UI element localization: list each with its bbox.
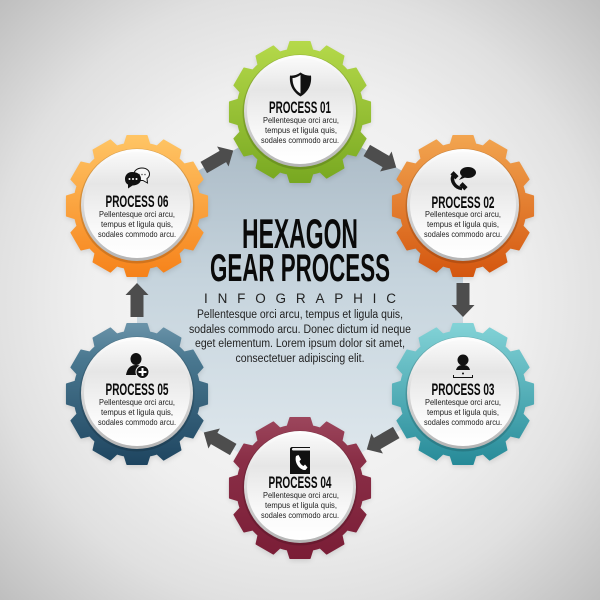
central hexagon panel (137, 112, 463, 488)
description: Pellentesque orci arcu, (263, 115, 339, 125)
description: tempus et ligula quis, (101, 219, 173, 229)
icon: person at laptop (453, 354, 473, 378)
arrow: 05 to 06 (126, 283, 148, 317)
arrow: 06 to 01 (198, 141, 239, 177)
icon: chat bubbles (125, 168, 150, 188)
description: sodales commodo arcu. (98, 229, 176, 239)
description: sodales commodo arcu. (98, 417, 176, 427)
title (210, 210, 390, 290)
label: PROCESS 03 (432, 381, 494, 399)
description: sodales commodo arcu. (261, 510, 339, 520)
arrow: 03 to 04 (361, 423, 402, 459)
description: tempus et ligula quis, (265, 125, 337, 135)
label: PROCESS 02 (432, 194, 494, 212)
description: Pellentesque orci arcu, (99, 209, 175, 219)
label: PROCESS 04 (268, 474, 332, 492)
label: PROCESS 06 (106, 193, 168, 211)
title: HEXAGON (242, 210, 358, 257)
gear: process 01 (230, 42, 370, 184)
description (261, 490, 339, 520)
description (424, 209, 502, 239)
subtitle: INFOGRAPHIC (204, 291, 396, 306)
description: tempus et ligula quis, (101, 407, 173, 417)
description: tempus et ligula quis, (265, 500, 337, 510)
description text: consectetuer adipiscing elit. (236, 353, 364, 365)
gear: process 06 (67, 136, 207, 278)
description text: sodales commodo arcu. Donec dictum id neque (189, 324, 411, 336)
label: PROCESS 05 (106, 381, 168, 399)
description: Pellentesque orci arcu, (425, 397, 501, 407)
description: Pellentesque orci arcu, (99, 397, 175, 407)
description (424, 397, 502, 427)
icon: shield (290, 72, 311, 96)
gear: process 03 (393, 324, 533, 466)
description text: eget elementum. Lorem ipsum dolor sit amet, (195, 338, 405, 350)
description: tempus et ligula quis, (427, 407, 499, 417)
description text: Pellentesque orci arcu, tempus et ligula quis, (197, 309, 403, 321)
arrow: 04 to 05 (198, 423, 239, 459)
gear: process 02 (393, 136, 533, 278)
description: Pellentesque orci arcu, (425, 209, 501, 219)
description (98, 209, 176, 239)
description: tempus et ligula quis, (427, 219, 499, 229)
arrow: 02 to 03 (452, 283, 474, 317)
description (98, 397, 176, 427)
label: PROCESS 01 (269, 99, 331, 117)
description text (189, 309, 411, 365)
description (261, 115, 339, 145)
icon: phone book (290, 447, 310, 474)
gear: process 05 (67, 324, 207, 466)
title: GEAR PROCESS (210, 247, 390, 290)
icon: add user (126, 353, 149, 378)
description: sodales commodo arcu. (424, 417, 502, 427)
gear: process 04 (230, 418, 370, 560)
description: sodales commodo arcu. (261, 135, 339, 145)
icon: phone and speech bubble (450, 167, 476, 190)
description: Pellentesque orci arcu, (263, 490, 339, 500)
arrow: 01 to 02 (361, 141, 402, 177)
description: sodales commodo arcu. (424, 229, 502, 239)
